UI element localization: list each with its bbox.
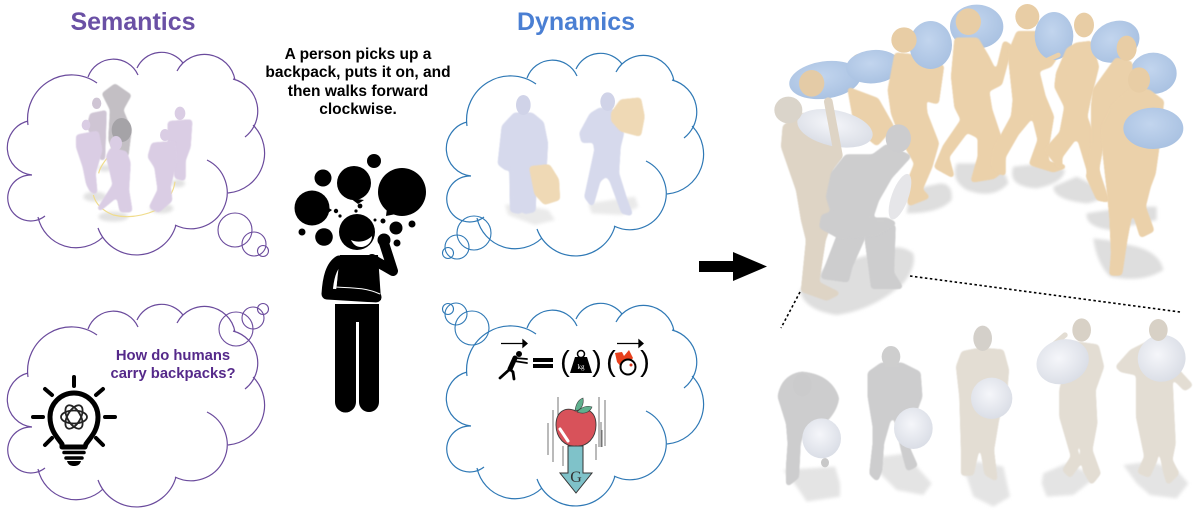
formula: force equals mass times acceleration <box>500 340 650 379</box>
figure: frame 3 <box>1088 36 1177 200</box>
figure: frame 6 <box>937 5 1010 180</box>
figure: frame 7 <box>890 21 952 203</box>
icon: force arrow <box>501 340 527 347</box>
icon: weight <box>570 350 592 373</box>
equals sign <box>533 358 553 368</box>
illustration: five keyframes picking up the backpack <box>780 318 1192 507</box>
figure: frame 5 <box>993 4 1073 173</box>
keyframe 5 <box>1118 319 1192 482</box>
text block: prompt: then walks forward <box>288 83 428 100</box>
keyframe 1 <box>780 374 841 483</box>
dotted zoom line: left <box>781 292 800 328</box>
icon: falling apple with gravity arrow: G <box>570 469 582 486</box>
text block: question: carry backpacks? <box>110 366 236 382</box>
shadows <box>800 163 1163 315</box>
icon: AI light bulb <box>33 377 115 466</box>
figure: frame 2 front <box>1103 67 1183 273</box>
text block: prompt: A person picks up a <box>285 46 431 63</box>
illustration: full motion arc of human carrying backpack <box>774 4 1183 315</box>
close bracket: ) <box>640 346 650 378</box>
keyframe 4 <box>1030 318 1102 482</box>
close bracket: ) <box>592 346 602 378</box>
figure: frame 8 <box>787 48 902 143</box>
dotted zoom line: right <box>910 276 1180 312</box>
icon: acceleration arrow <box>617 340 643 347</box>
keyframe 3 <box>958 326 1012 478</box>
figure: beige transition <box>774 97 876 298</box>
icon: falling apple with gravity arrow <box>548 397 605 493</box>
illustration: two figures with a backpack <box>500 92 642 225</box>
figure: grey bending <box>822 124 916 287</box>
text block: prompt: backpack, puts it on, and <box>265 64 451 81</box>
icon: speedometer with flame <box>615 350 636 374</box>
heading: Semantics: Semantics <box>70 8 196 36</box>
illustration: lavender motion sequence on a circular path <box>78 83 190 222</box>
arrow <box>699 252 767 281</box>
keyframe 2 <box>870 346 933 478</box>
panel: physics thought cloud <box>442 303 704 506</box>
text block: prompt: clockwise. <box>319 101 397 118</box>
panel: question thought cloud <box>7 304 268 507</box>
figure: frame 4 <box>1047 13 1146 193</box>
panel: dynamics thought cloud <box>442 53 704 259</box>
panel: semantics thought cloud <box>7 52 268 256</box>
text block: question: How do humans <box>116 348 230 364</box>
icon: thinking person <box>294 154 426 412</box>
open bracket: ( <box>560 346 570 378</box>
open bracket: ( <box>606 346 616 378</box>
icon: weight: kg <box>578 363 585 371</box>
icon: person pushing <box>500 351 527 379</box>
shadows <box>783 453 1188 507</box>
heading: Dynamics: Dynamics <box>517 8 635 36</box>
